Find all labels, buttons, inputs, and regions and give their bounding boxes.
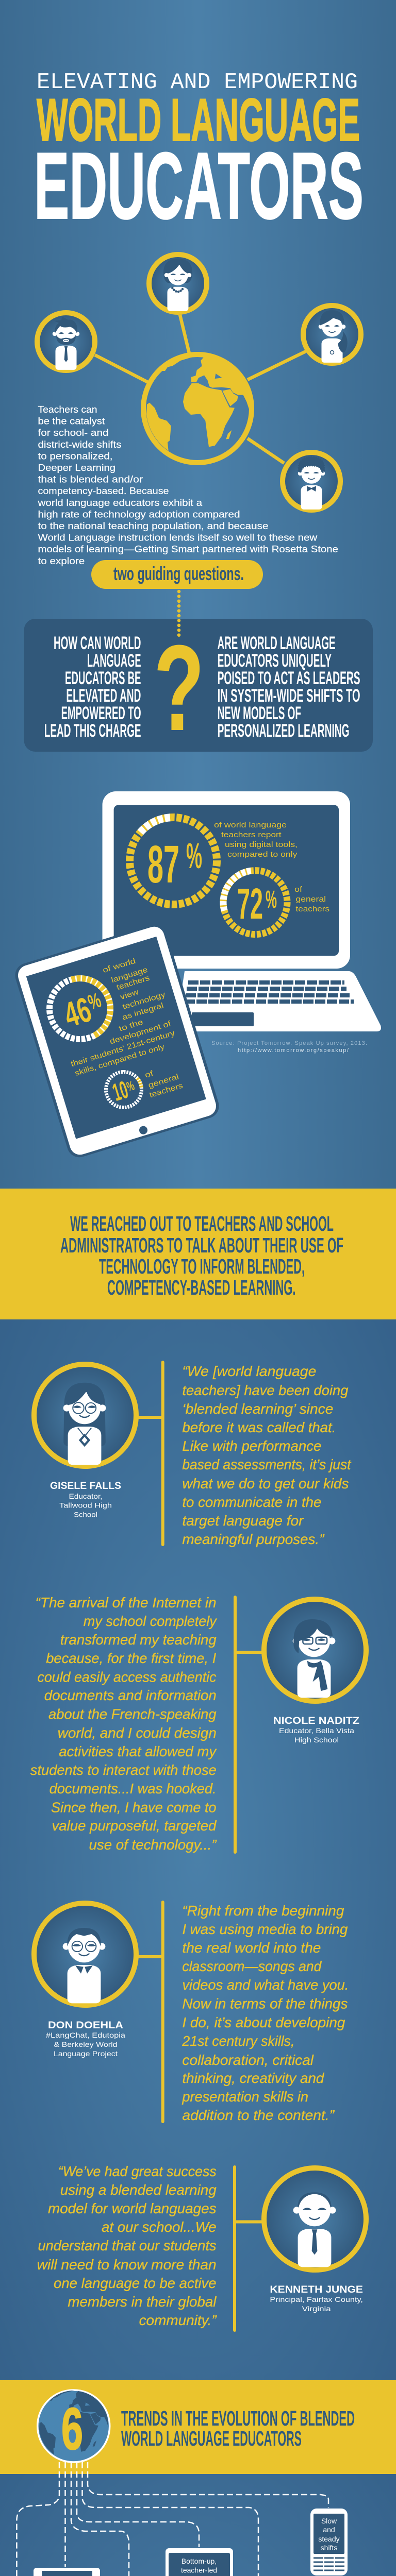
quote: Nicole Naditz: world, and I could design [58,1725,217,1741]
caption: technology integral: view [119,988,140,1002]
quote: Gisele Falls: “We [world language [182,1363,316,1379]
quote: Don Doehla: I was using media to bring [182,1921,348,1937]
caption: technology integral: to the [118,1018,144,1033]
intro text: high rate of technology adoption compared [38,509,240,519]
quote: Nicole Naditz [30,1595,218,1853]
intro text: competency-based. Because [38,486,169,496]
icon: globe with number 6 [38,2390,110,2462]
caption: technology integral: their students' 21st-century [70,1028,176,1069]
testimonial: Don Doehla [34,1902,349,2123]
intro text: to the national teaching population, and because [38,521,268,531]
quote: Don Doehla: collaboration, critical [182,2052,314,2068]
quote: Kenneth Junge [37,2163,217,2328]
quote: Don Doehla: Now in terms of the things [182,1995,348,2011]
quote: Nicole Naditz: students to interact with those [30,1762,217,1778]
caption: world language teachers [214,821,298,859]
caption: general teachers on tablet: of [144,1069,155,1080]
quote: Gisele Falls: target language for [182,1513,304,1529]
quote: Gisele Falls: Like with performance [182,1438,321,1454]
device: phone, slow and steady shifts: steady [318,2535,340,2543]
caption: world language teachers: using digital tools, [225,840,298,849]
caption: technology integral: language [110,965,149,985]
testimonial: Kenneth Junge [37,2163,366,2330]
portrait: Nicole Naditz [264,1599,366,1701]
laptop chart: digital tools [102,791,381,1031]
name: Nicole Naditz: NICOLE NADITZ [273,1716,359,1726]
intro text: be the catalyst [38,416,105,427]
avatar: left [37,313,95,370]
intro text: Teachers can [38,404,97,415]
name: Don Doehla: Language Project [54,2049,118,2058]
quote: Kenneth Junge: “We’ve had great success [58,2163,217,2179]
quote: Don Doehla: thinking, creativity and [182,2070,325,2086]
portrait: Gisele Falls [34,1364,136,1466]
portrait: Don Doehla [34,1903,136,2005]
quote: Kenneth Junge: at our school...We [102,2219,217,2235]
ring: 10 percent: % [125,1078,136,1094]
name: Don Doehla [46,2020,125,2058]
name: Gisele Falls: Tallwood High [59,1501,112,1510]
caption: technology integral: technology [122,990,167,1011]
quote: Gisele Falls [182,1363,352,1547]
caption: world language teachers: of world language [214,821,287,829]
caption: technology integral: as integral [121,1001,164,1022]
title [34,70,364,239]
quote: Kenneth Junge: understand that our students [38,2238,217,2253]
banner: six trends [0,2380,396,2474]
name: Nicole Naditz: Educator, Bella Vista [279,1726,354,1735]
panel: guiding questions [24,591,373,756]
quote: Nicole Naditz: about the French-speaking [48,1706,217,1722]
icon: globe with number 6: 6 [61,2396,83,2462]
intro text: that is blended and/or [38,474,143,485]
testimonial: Gisele Falls [34,1362,352,1547]
ring: 46 percent: 46 [60,990,96,1035]
question one: ELEVATED AND [66,686,141,706]
avatar: right [303,306,361,363]
intro text [37,404,338,566]
intro text: World Language instruction lends itself so well to these new [38,533,318,543]
name: Gisele Falls: Educator, [69,1492,102,1500]
quote: Nicole Naditz: documents and information [44,1687,217,1703]
question two [218,633,360,741]
caption: technology integral [70,957,176,1078]
name: Nicole Naditz: High School [294,1736,339,1744]
avatar: top [149,255,207,312]
quote: Nicole Naditz: use of technology...” [89,1837,217,1853]
portrait: Kenneth Junge [264,2168,366,2270]
quote: Don Doehla: videos and what have you. [182,1977,349,1993]
name: Kenneth Junge: KENNETH JUNGE [270,2284,363,2295]
quote: Don Doehla: I do, it’s about developing [182,2014,345,2030]
quote: Nicole Naditz: “The arrival of the Internet in [36,1595,217,1611]
ring: 10 percent: 10 [109,1076,131,1107]
caption: general teachers: teachers [296,905,329,913]
ring: 46 percent: % [85,989,104,1014]
intro text: models of learning—Getting Smart partnered with Rosetta Stone [38,544,338,554]
caption: general teachers: of [294,885,303,894]
quote: Don Doehla: “Right from the beginning [182,1903,344,1919]
quote: Kenneth Junge: using a blended learning [60,2182,217,2198]
intro text: to explore [38,556,85,566]
pill: two guiding questions [91,560,263,589]
tablet chart: 21st-century skills [12,921,222,1160]
ring: 87 percent: % [186,836,202,876]
quote: Nicole Naditz: transformed my teaching [60,1632,217,1648]
question one: EMPOWERED TO [61,703,141,723]
banner: we reached out [0,1189,396,1319]
question one: LEAD THIS CHARGE [44,721,141,741]
caption: technology integral: skills, compared to only [74,1042,166,1078]
quote: Kenneth Junge: will need to know more than [37,2257,217,2273]
section background: intro [0,0,396,1189]
quote: Gisele Falls: based assessments, it’s just [182,1456,352,1472]
name: Gisele Falls: GISELE FALLS [50,1481,121,1492]
quote: Don Doehla: addition to the content.” [182,2107,335,2123]
device: phone, slow and steady shifts: and [323,2526,335,2534]
heading: trends [121,2406,355,2450]
ring: 72 percent: % [266,886,277,913]
quote: Nicole Naditz: could easily access authentic [37,1669,217,1685]
caption: technology integral: teachers [116,974,151,992]
quote: Nicole Naditz: my school completely [84,1613,218,1629]
quote: Nicole Naditz: value purposeful, targeted [52,1818,217,1834]
intro text: for school- and [38,428,108,438]
quote: Don Doehla [182,1903,349,2123]
question one [44,633,141,741]
quote: Nicole Naditz: Since then, I have come to [51,1800,217,1816]
ring: 87 percent: 87 [147,835,179,894]
quote: Nicole Naditz: documents...I was hooked. [50,1781,217,1797]
quote: Kenneth Junge: members in their global [68,2294,217,2310]
section background: quotes [0,1319,396,2380]
caption: world language teachers: teachers report [221,831,282,839]
caption: general teachers on tablet: teachers [148,1081,184,1099]
ring: 72 percent [216,863,294,942]
name: Kenneth Junge: Virginia [302,2304,331,2313]
question one: EDUCATORS BE [65,668,141,688]
quote: Don Doehla: classroom—songs and [182,1958,322,1974]
caption: general teachers on tablet: general [147,1072,180,1090]
name: Don Doehla: #LangChat, Edutopia [46,2031,125,2039]
avatar: lower right [283,452,340,510]
network of teachers around the globe [37,255,361,510]
title: ELEVATING AND EMPOWERING [37,70,358,95]
quote: Gisele Falls: meaningful purposes.” [182,1531,325,1547]
name: Nicole Naditz [273,1716,359,1744]
quote: Gisele Falls: before it was called that. [182,1419,336,1435]
quote: Kenneth Junge: one language to be active [54,2275,217,2291]
name: Kenneth Junge: Principal, Fairfax County, [270,2295,363,2303]
caption: general teachers: general [296,895,326,904]
ring: 10 percent [98,1064,149,1115]
device: tablet, common entry points [34,2568,100,2576]
device: laptop, bottom-up adoption: Bottom-up, [182,2557,217,2565]
question one: LANGUAGE [87,651,141,671]
name: Don Doehla: DON DOEHLA [48,2020,123,2031]
name: Gisele Falls [50,1481,121,1519]
ring: 87 percent [112,800,235,922]
pill: two guiding questions: two guiding questions. [113,563,244,584]
source note [211,1040,367,1054]
quote: Kenneth Junge: model for world languages [48,2200,217,2216]
caption: technology integral: of world [102,957,137,975]
dashed connectors [16,2462,328,2576]
name: Kenneth Junge [270,2284,363,2313]
name: Don Doehla: & Berkeley World [54,2040,118,2048]
device: laptop, bottom-up adoption: teacher-led [181,2566,217,2574]
intro text: Deeper Learning [38,463,116,473]
device: phone, slow and steady shifts [310,2509,348,2575]
caption: world language teachers: compared to only [227,850,298,859]
quote: Gisele Falls: to communicate in the [182,1494,321,1510]
device: phone, slow and steady shifts: Slow [321,2517,337,2525]
quote: Don Doehla: presentation skills in [182,2089,308,2105]
quote: Gisele Falls: teachers] have been doing [182,1382,349,1398]
quote: Nicole Naditz: activities that allowed my [59,1743,217,1759]
icon: globe [143,354,252,463]
ring: 72 percent: 72 [237,879,263,928]
device: phone, slow and steady shifts: shifts [321,2544,337,2552]
quote: Gisele Falls: ‘blended learning’ since [182,1401,333,1417]
section background: trends and discoveries [0,2474,396,2576]
quote: Gisele Falls: what we do to get our kids [182,1476,349,1492]
quote: Don Doehla: 21st century skills, [182,2033,294,2049]
quote: Don Doehla: the real world into the [182,1940,321,1956]
intro text: world language educators exhibit a [37,498,203,508]
device: laptop, bottom-up adoption [156,2548,241,2576]
icon: question mark: ? [154,620,204,756]
question one: HOW CAN WORLD [54,633,141,653]
intro text: to personalized, [38,451,112,461]
quote: Kenneth Junge: community.” [139,2312,217,2328]
testimonial: Nicole Naditz [30,1595,366,1853]
ring: 46 percent [42,971,118,1046]
caption: general teachers on tablet [144,1069,184,1099]
caption: technology integral: development of [109,1019,172,1046]
name: Gisele Falls: School [74,1511,97,1519]
source note: Source: Project Tomorrow. Speak Up survey, 2013. [211,1040,367,1046]
quote: Nicole Naditz: because, for the first time, I [46,1650,216,1666]
source note: http://www.tomorrow.org/speakup/ [238,1047,349,1054]
caption: general teachers [294,885,329,913]
intro text: district-wide shifts [38,439,121,450]
question two: NEW MODELS OF [218,703,301,723]
